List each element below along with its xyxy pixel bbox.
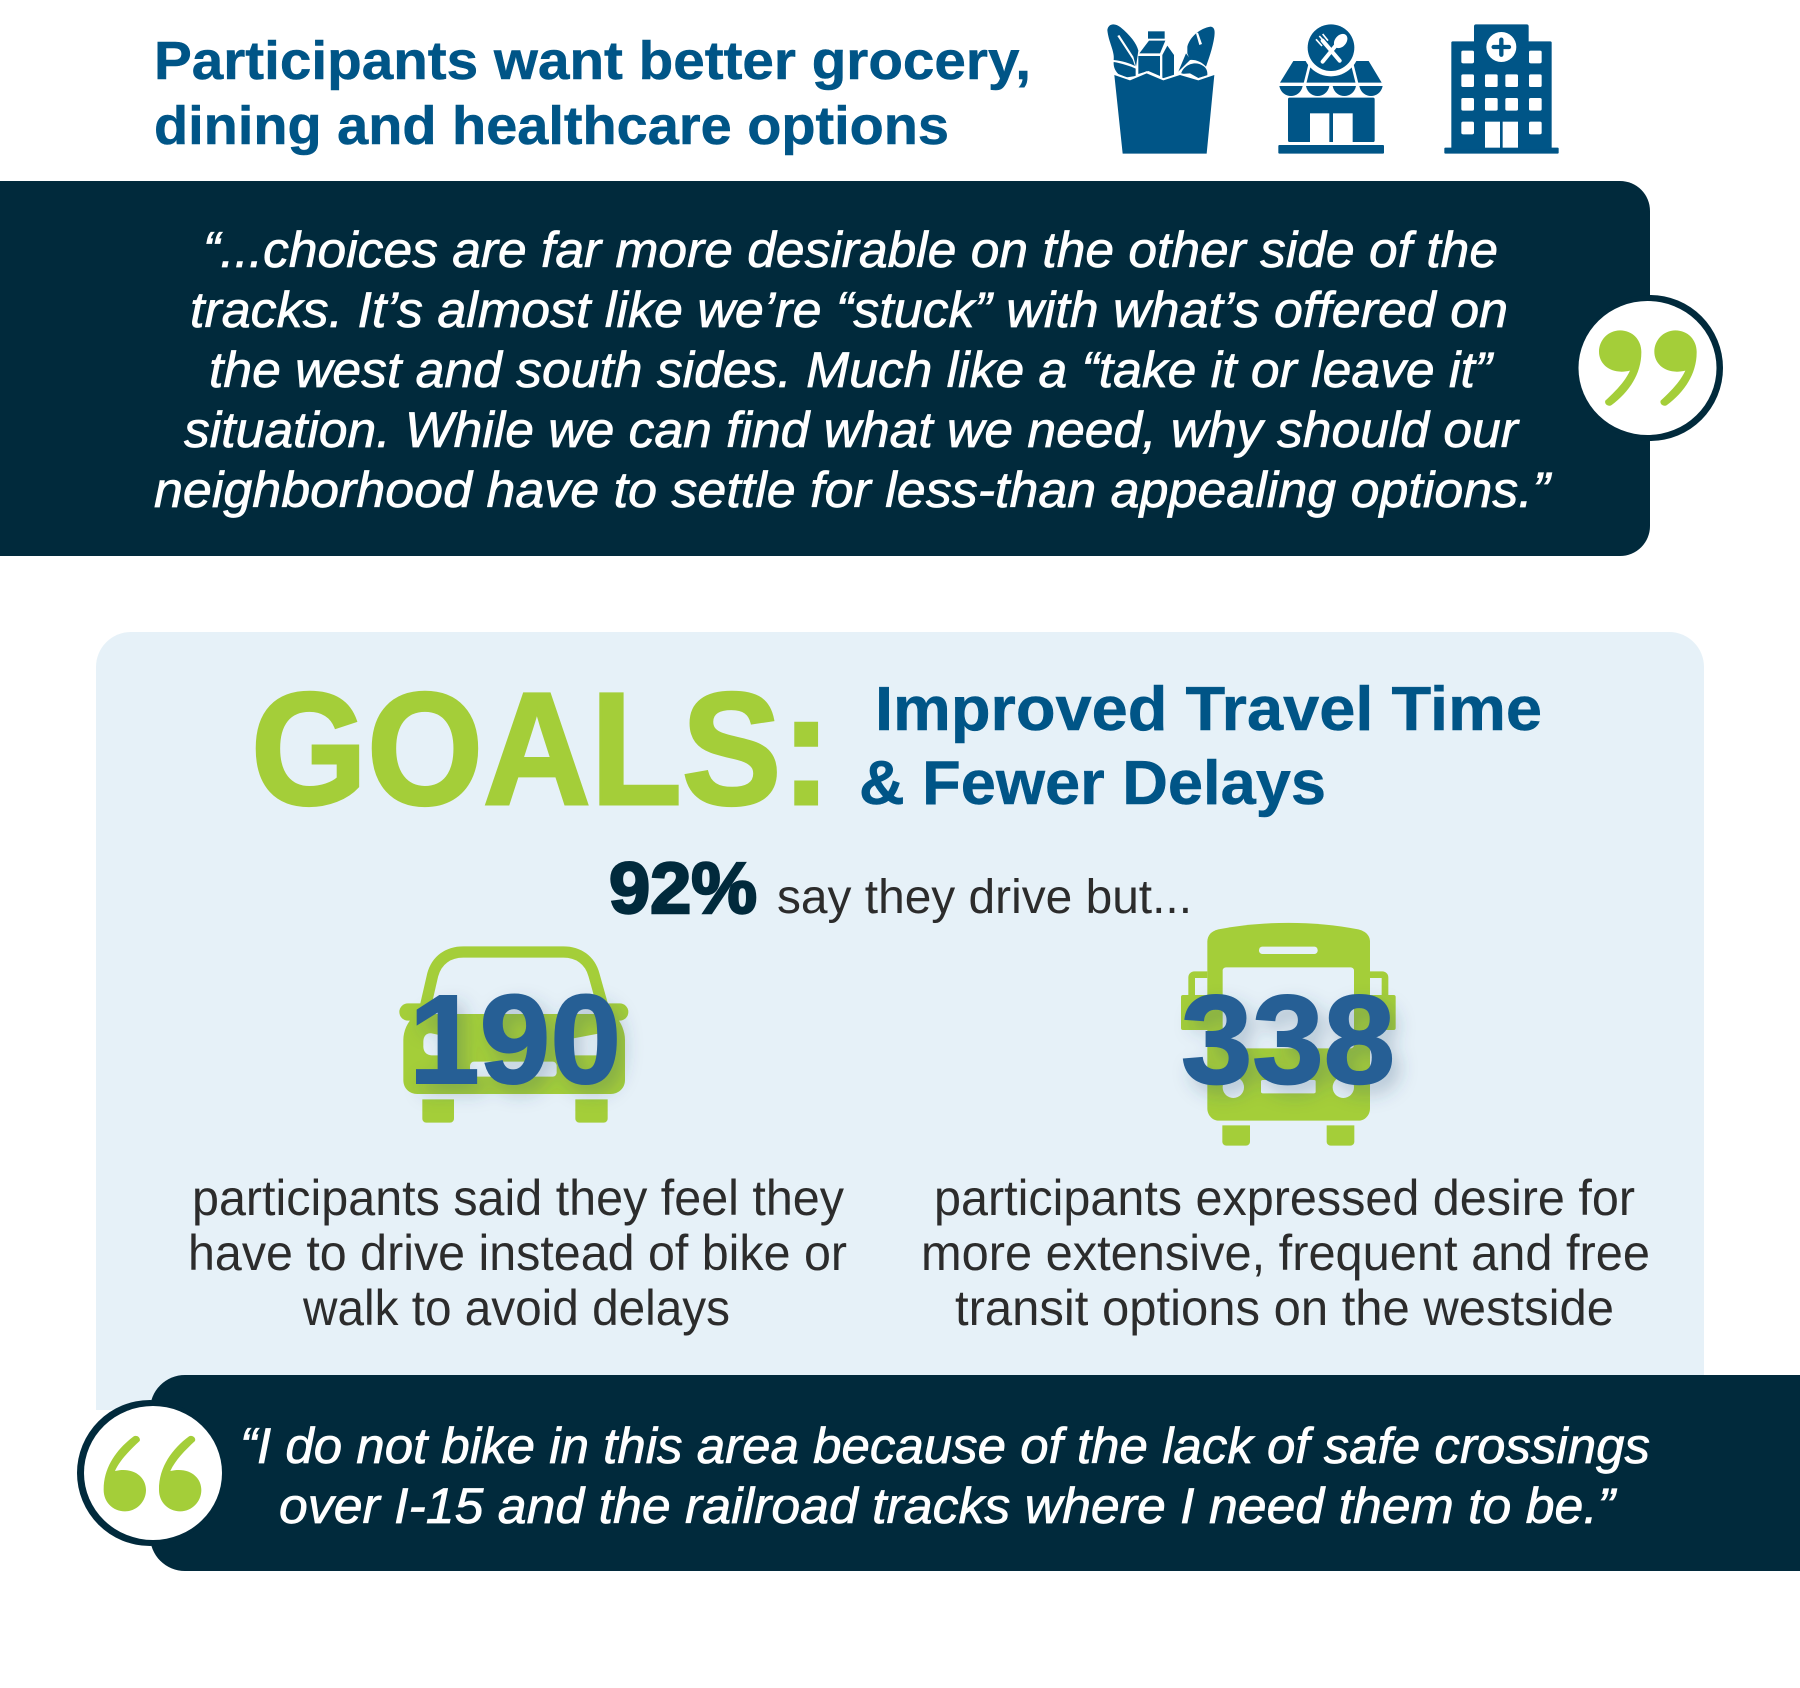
- text: transit options: more extensive, frequent and free: [921, 1225, 1650, 1281]
- text: transit options: participants expressed desire for: [934, 1170, 1635, 1226]
- stat: 92 percent: say they drive but...: [777, 871, 1192, 924]
- quote text: over I-15 and the railroad tracks where I need them to be.”: [279, 1478, 1617, 1534]
- heading: goals: GOALS:: [251, 659, 831, 838]
- quote text: tracks. It’s almost like we’re “stuck” with what’s offered on: [190, 282, 1508, 338]
- icon: bus: [1181, 923, 1396, 1146]
- icon: car: [399, 952, 628, 1123]
- title: dining and healthcare options: [154, 96, 949, 156]
- quote text: “...choices are far more desirable on the other side of the: [203, 222, 1498, 278]
- text: transit options: transit options on the westside: [955, 1280, 1614, 1336]
- quote text: neighborhood have to settle for less-than appealing options.”: [154, 462, 1552, 518]
- quote text: “I do not bike in this area because of the lack of safe crossings: [240, 1418, 1650, 1474]
- panel: goals: [96, 632, 1704, 1410]
- heading: improved travel time: Improved Travel Time: [875, 675, 1542, 744]
- icon: opening quote badge: [77, 1400, 223, 1546]
- number: 190: 190: [409, 969, 621, 1110]
- stat: 92 percent: 92%: [609, 849, 757, 929]
- heading: improved travel time: [859, 675, 1542, 818]
- title: Participants want better grocery,: [154, 31, 1031, 91]
- text: drive instead: walk to avoid delays: [302, 1280, 730, 1336]
- icon: restaurant storefront: [1278, 19, 1384, 154]
- quote text: the west and south sides. Much like a “take it or leave it”: [209, 342, 1494, 398]
- text: drive instead: [188, 1170, 847, 1336]
- quote text: [240, 1418, 1650, 1534]
- text: drive instead: participants said they feel they: [192, 1170, 844, 1226]
- icon: hospital: [1444, 24, 1559, 154]
- heading: improved travel time: & Fewer Delays: [859, 749, 1326, 818]
- text: drive instead: have to drive instead of bike or: [188, 1225, 847, 1281]
- text: transit options: [921, 1170, 1650, 1336]
- title: [154, 31, 1031, 156]
- number: 338: 338: [1181, 969, 1395, 1110]
- icon: closing quote badge: [1577, 295, 1723, 441]
- stat: 92 percent: [609, 849, 1192, 929]
- quote text: [154, 222, 1552, 518]
- quote text: situation. While we can find what we need, why should our: [184, 402, 1520, 458]
- icon: grocery bag: [1107, 24, 1215, 154]
- panel: top quote: [0, 181, 1650, 556]
- panel: bottom quote: [150, 1375, 1800, 1571]
